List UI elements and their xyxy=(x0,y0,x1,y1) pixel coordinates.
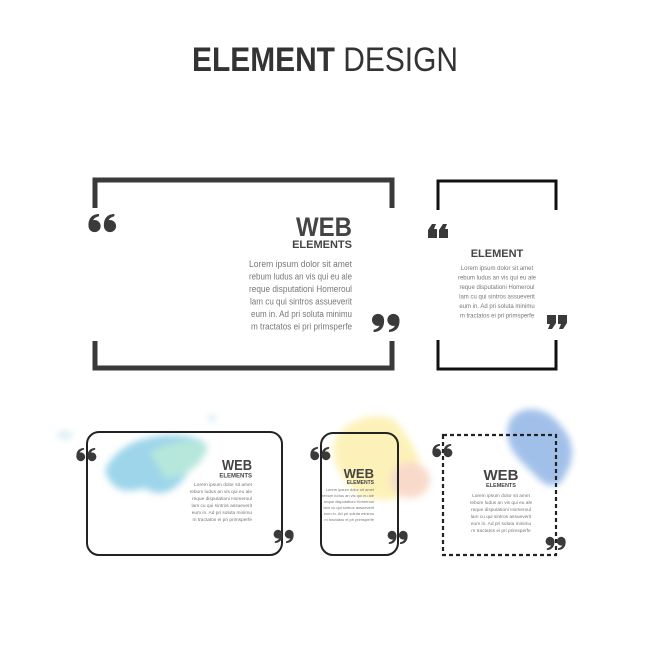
text block: reque disputationi Homeroul xyxy=(249,284,352,294)
panel: large bracket frame xyxy=(89,180,399,368)
heading: ELEMENTS xyxy=(347,480,375,486)
text block: rebum ludus an vis qui eu ale xyxy=(190,489,252,495)
watercolor: yellow-pink xyxy=(334,416,430,500)
heading xyxy=(219,457,252,480)
watercolor: blue-green splash xyxy=(57,415,215,493)
heading: WEB xyxy=(484,467,519,484)
panel: rounded frame B xyxy=(310,433,408,555)
text block xyxy=(322,487,375,522)
text block: rebum ludus an vis qui eu ale xyxy=(470,500,533,506)
text block: eum in. Ad pri soluta minimu xyxy=(459,304,535,310)
heading: WEB xyxy=(344,466,374,481)
text block: rebum ludus an vis qui eu ale xyxy=(458,276,537,282)
icon: close block quote xyxy=(547,315,567,329)
heading: WEB xyxy=(222,457,252,474)
text block: eum in. Ad pri soluta minimu xyxy=(471,521,531,527)
text block: reque disputationi Homeroul xyxy=(192,496,252,502)
icon: open quote xyxy=(76,448,96,461)
text block: lam cu qui sintros assueverit xyxy=(459,294,535,300)
icon: open quote xyxy=(310,447,330,460)
icon: open quote xyxy=(432,444,452,457)
text block: lam cu qui sintros assueverit xyxy=(250,296,352,306)
text block: Lorem ipsum dolor sit amet xyxy=(194,482,253,488)
icon: close quote xyxy=(372,314,399,332)
panel: rounded frame A xyxy=(76,432,294,555)
text block: lam cu qui sintros assueverit xyxy=(191,503,253,509)
icon: close quote xyxy=(546,537,566,550)
text block xyxy=(190,482,253,523)
text block: Lorem ipsum dolor sit amet xyxy=(461,266,534,272)
heading: WEB ELEMENTS: WEB xyxy=(296,212,352,242)
text block: m tractatos ei pri primsperfe xyxy=(251,322,352,332)
text block: Lorem ipsum dolor sit amet xyxy=(326,487,375,492)
text block: lam cu qui sintros assueverit xyxy=(324,505,375,510)
panel: dashed frame C xyxy=(432,435,566,555)
text block: Lorem ipsum dolor sit amet xyxy=(472,493,531,499)
text block: eum in. Ad pri soluta minimu xyxy=(192,510,252,516)
icon: close quote xyxy=(274,530,294,543)
text block: reque disputationi Homeroul xyxy=(324,499,374,504)
text block: m tractatos ei pri primsperfe xyxy=(471,528,531,534)
text block: eum in. Ad pri soluta minimu xyxy=(251,309,352,319)
icon: open quote xyxy=(89,214,116,232)
text block: lam cu qui sintros assueverit xyxy=(471,514,532,520)
panel: tall bracket frame xyxy=(428,181,567,369)
text block: m tractatos ei pri primsperfe xyxy=(193,517,252,523)
text block xyxy=(470,493,533,534)
text block: eum in. Ad pri soluta minimu xyxy=(324,511,374,516)
text block xyxy=(249,259,352,332)
text block: m tractatos ei pri primsperfe xyxy=(460,314,535,320)
text block xyxy=(458,266,537,320)
text block: rebum ludus an vis qui eu ale xyxy=(322,493,375,498)
icon: close quote xyxy=(388,531,408,544)
heading: WEB ELEMENTS xyxy=(292,212,352,251)
text block: Lorem ipsum dolor sit amet xyxy=(249,259,352,269)
text block: reque disputationi Homeroul xyxy=(459,285,535,291)
text block: rebum ludus an vis qui eu ale xyxy=(249,272,352,282)
text block: m tractatos ei pri primsperfe xyxy=(324,517,375,522)
text block: reque disputationi Homeroul xyxy=(471,507,531,513)
heading: ELEMENTS xyxy=(486,483,516,489)
icon: open block quote xyxy=(428,224,448,238)
title: ELEMENT DESIGN xyxy=(192,41,458,79)
heading: ELEMENT: ELEMENT xyxy=(471,248,524,260)
heading: WEB ELEMENTS: ELEMENTS xyxy=(292,239,352,251)
heading: ELEMENTS xyxy=(219,474,252,480)
watercolor: blue xyxy=(507,409,572,486)
